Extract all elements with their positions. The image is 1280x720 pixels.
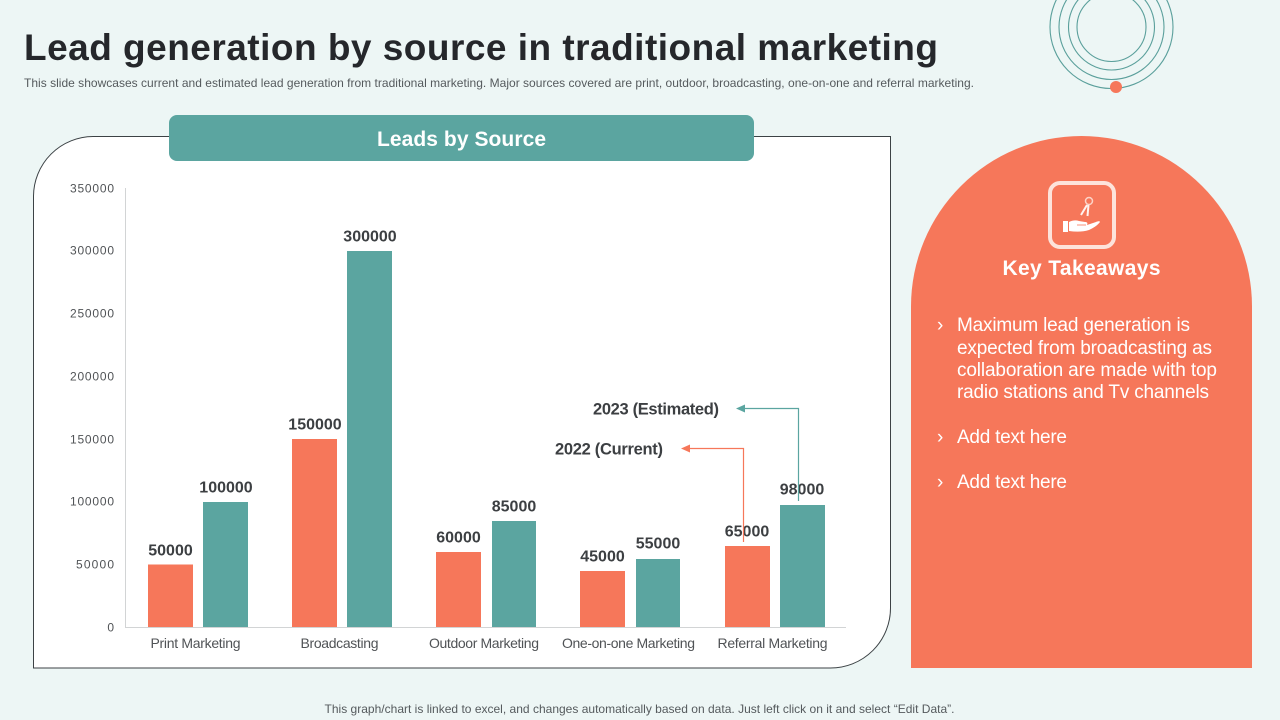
takeaway list: Maximum lead generation is: [957, 315, 1190, 336]
category labels: Broadcasting: [300, 635, 378, 651]
panel heading: Leads by Source: [169, 115, 754, 161]
title: Lead generation by source in traditional marketing: [24, 27, 938, 68]
takeaway list: ›: [937, 427, 943, 448]
y axis labels: 250000: [70, 306, 114, 320]
category labels: [150, 635, 828, 651]
bars: 2023 estimated: [203, 251, 825, 627]
takeaway list: Add text here: [957, 427, 1067, 448]
subtitle: This slide showcases current and estimated lead generation from traditional marketing. Major sources covered are print, outdoor, broadcasting, one-on-one and referral marketing.: [24, 76, 974, 90]
takeaway list: Add text here: [957, 472, 1067, 493]
data labels: [148, 228, 824, 566]
category labels: One-on-one Marketing: [562, 635, 695, 651]
data labels: 55000: [636, 536, 680, 552]
takeaway list: ›: [937, 315, 943, 336]
y axis labels: 300000: [70, 244, 114, 258]
data labels: 100000: [199, 480, 253, 496]
data labels: 98000: [780, 482, 824, 498]
y axis labels: 200000: [70, 370, 114, 384]
takeaway list: radio stations and Tv channels: [957, 382, 1209, 403]
category labels: Referral Marketing: [718, 635, 828, 651]
takeaway list: [937, 315, 1217, 493]
data labels: 150000: [288, 416, 342, 434]
data labels: 60000: [436, 530, 481, 546]
heading: key takeaways: Key Takeaways: [1002, 257, 1160, 280]
y axis labels: 0: [107, 620, 114, 634]
legend: 2023 estimated with arrow: [593, 400, 798, 501]
legend: 2023 estimated with arrow: 2023 (Estimated): [593, 400, 719, 418]
icon: hand holding keys: [1050, 183, 1114, 247]
y axis labels: 150000: [70, 432, 114, 446]
panel: key takeaways: [911, 136, 1252, 668]
data labels: 300000: [343, 228, 397, 246]
bars: 2022 current: [148, 439, 770, 627]
y axis labels: 50000: [76, 558, 114, 572]
y axis labels: 350000: [70, 182, 114, 196]
takeaway list: collaboration are made with top: [957, 360, 1217, 381]
category labels: Print Marketing: [150, 635, 240, 651]
data labels: 85000: [492, 498, 536, 516]
takeaway list: expected from broadcasting as: [957, 338, 1212, 359]
footnote: This graph/chart is linked to excel, and changes automatically based on data. Just left click on it and select “Edit Data”.: [324, 702, 954, 716]
decorative concentric circles: [1050, 0, 1173, 93]
panel heading: Leads by Source: Leads by Source: [377, 128, 546, 151]
y axis labels: [70, 182, 114, 634]
bar chart: [70, 182, 846, 651]
axes: [126, 188, 846, 628]
data labels: 65000: [725, 524, 769, 540]
panel: chart card: [34, 136, 890, 668]
category labels: Outdoor Marketing: [429, 635, 539, 651]
data labels: 45000: [580, 548, 625, 566]
legend: 2022 current with arrow: [555, 440, 744, 542]
data labels: 50000: [148, 542, 193, 560]
legend: 2022 current with arrow: 2022 (Current): [555, 440, 663, 458]
y axis labels: 100000: [70, 494, 114, 508]
takeaway list: ›: [937, 472, 943, 493]
